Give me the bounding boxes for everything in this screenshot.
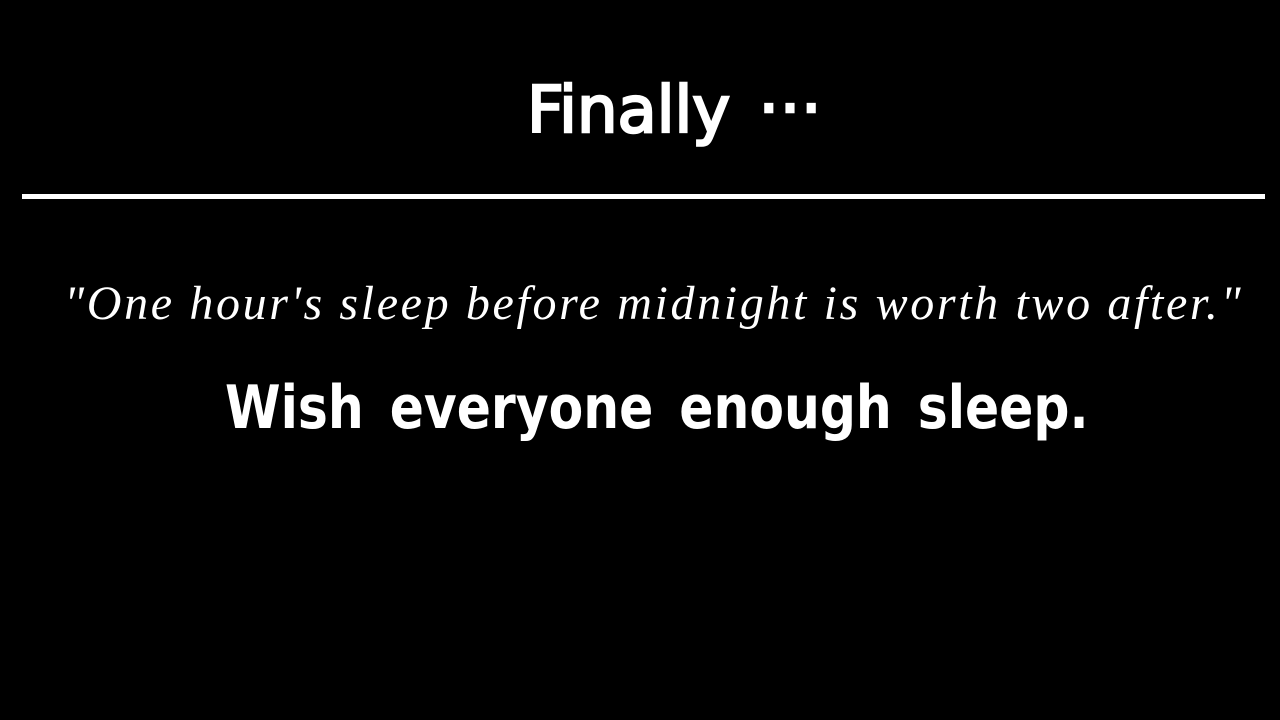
title: Finally ⋯ xyxy=(527,70,823,148)
divider line xyxy=(22,194,1265,199)
closing message: Wish everyone enough sleep. xyxy=(225,373,1089,443)
quote: "One hour's sleep before midnight is worth two after." xyxy=(64,277,1243,330)
